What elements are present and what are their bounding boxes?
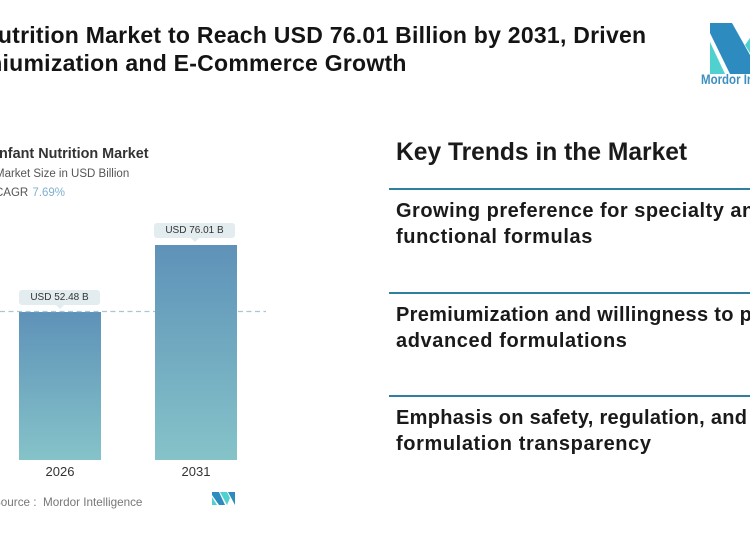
trend 2 — [396, 304, 750, 352]
trend 3 — [396, 407, 747, 455]
icon: small logo — [212, 492, 235, 505]
trend 1: functional formulas — [396, 226, 593, 248]
divider: trend 1 — [389, 188, 750, 190]
axis label: 2031: 2031 — [182, 464, 210, 479]
label pointer: 2026 — [56, 305, 64, 309]
value label: 2026: USD 52.48 B — [30, 292, 89, 303]
title — [0, 22, 646, 76]
value label: 2031: USD 76.01 B — [165, 225, 224, 236]
trend 2: advanced formulations — [396, 330, 628, 352]
bar: 2031 — [155, 245, 237, 460]
title: Nutrition Market to Reach USD 76.01 Billion by 2031, Driven — [0, 22, 646, 48]
dashed reference line — [0, 310, 266, 312]
value label: 2026 — [19, 290, 100, 305]
panel: bar chart — [0, 145, 266, 509]
axis label: 2026: 2026 — [46, 464, 74, 479]
divider: trend 3 — [389, 395, 750, 397]
bar: 2026 — [19, 312, 101, 460]
logo: Mordor Intelligence — [701, 23, 750, 87]
heading: key trends: Key Trends in the Market — [396, 139, 687, 166]
label pointer: 2031 — [191, 238, 199, 242]
value label: 2031 — [154, 223, 235, 238]
trend 1 — [396, 200, 750, 248]
trend 3: Emphasis on safety, regulation, and — [396, 407, 747, 429]
divider: trend 2 — [389, 292, 750, 294]
trend 3: formulation transparency — [396, 433, 652, 455]
